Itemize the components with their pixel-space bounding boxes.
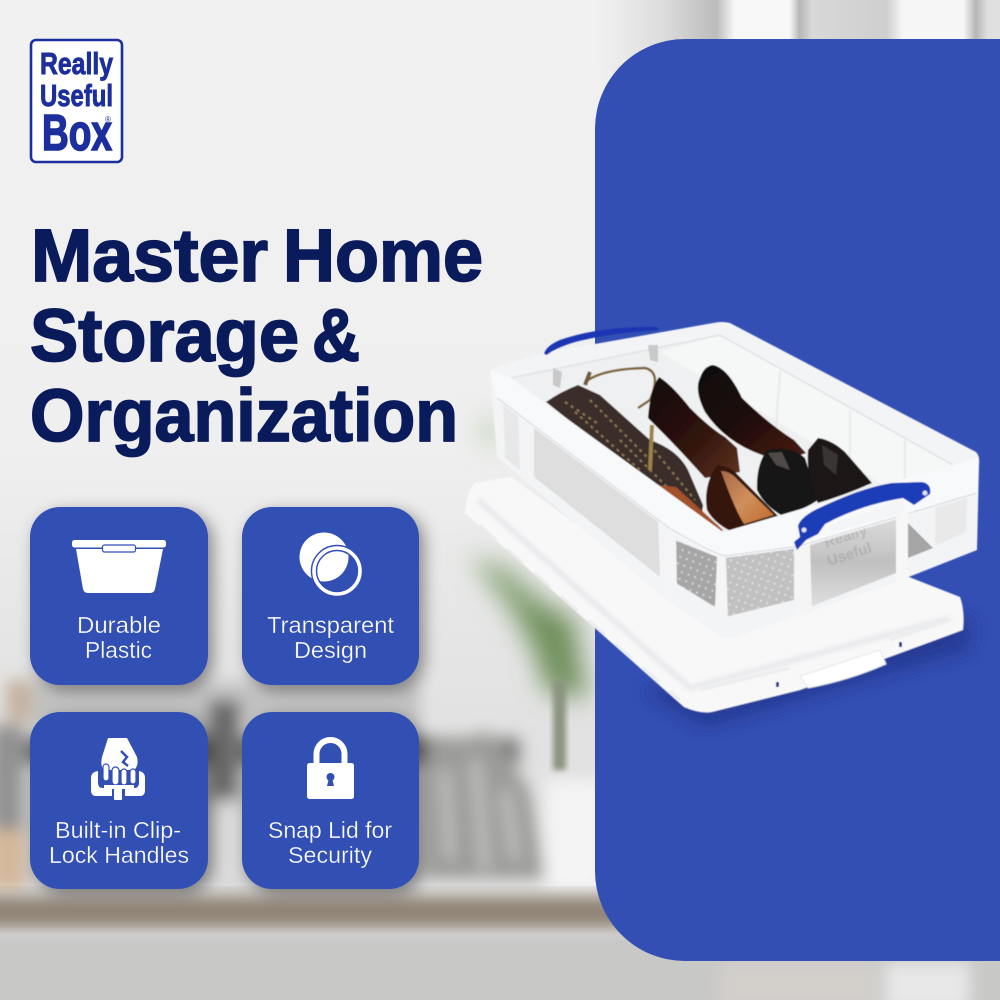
front rim	[490, 370, 979, 558]
card: durable plastic	[30, 507, 208, 685]
box interior	[511, 335, 953, 532]
card: clip-lock handles	[30, 712, 208, 889]
label: snap lid for security	[268, 817, 392, 868]
back handle	[544, 327, 659, 355]
label: durable plastic: Plastic	[85, 637, 152, 663]
label: clip-lock handles: Lock Handles	[49, 842, 189, 868]
blurred plant	[470, 415, 590, 700]
box body	[490, 322, 979, 638]
label: clip-lock handles	[49, 817, 189, 868]
embossed front text	[822, 522, 874, 570]
title	[30, 214, 483, 457]
logo: Box	[42, 104, 112, 161]
front upright posts	[796, 543, 812, 618]
left side window	[534, 425, 660, 577]
logo: ®	[105, 115, 111, 124]
title: &	[312, 294, 360, 377]
icon: overlapping circles	[300, 532, 360, 594]
logo: Really	[40, 46, 114, 81]
front windows	[675, 540, 717, 607]
embossed front text: Really	[822, 522, 870, 552]
logo	[31, 40, 122, 162]
embossed front text: Useful	[825, 539, 874, 570]
product: clear storage box with lid	[465, 322, 979, 728]
label: snap lid for security: Security	[288, 842, 372, 868]
card: transparent design	[242, 507, 419, 685]
icon: padlock	[307, 740, 354, 799]
label: clip-lock handles: Built-in Clip-	[55, 817, 181, 843]
blue background panel	[595, 39, 1000, 961]
title: Storage	[30, 294, 299, 377]
product shadow on panel	[640, 615, 972, 728]
floor	[0, 936, 1000, 1000]
label: transparent design: Design	[294, 637, 367, 663]
front handle	[794, 482, 930, 550]
card: snap lid	[242, 712, 419, 889]
icon: storage tub	[72, 540, 166, 593]
left end window	[503, 400, 520, 470]
title: Home	[283, 214, 483, 297]
title: Organization	[30, 374, 458, 457]
label: transparent design: Transparent	[267, 612, 395, 638]
wooden shelf band	[0, 896, 1000, 928]
logo: Useful	[40, 78, 113, 113]
label: durable plastic: Durable	[77, 612, 161, 638]
handbag	[546, 368, 703, 530]
shoes	[648, 365, 872, 540]
icon: hand gripping clip handle	[91, 738, 145, 800]
lid	[465, 477, 964, 712]
label: transparent design	[267, 612, 395, 663]
label: snap lid for security: Snap Lid for	[268, 817, 392, 843]
title: Master	[31, 214, 268, 297]
label: durable plastic	[77, 612, 161, 663]
